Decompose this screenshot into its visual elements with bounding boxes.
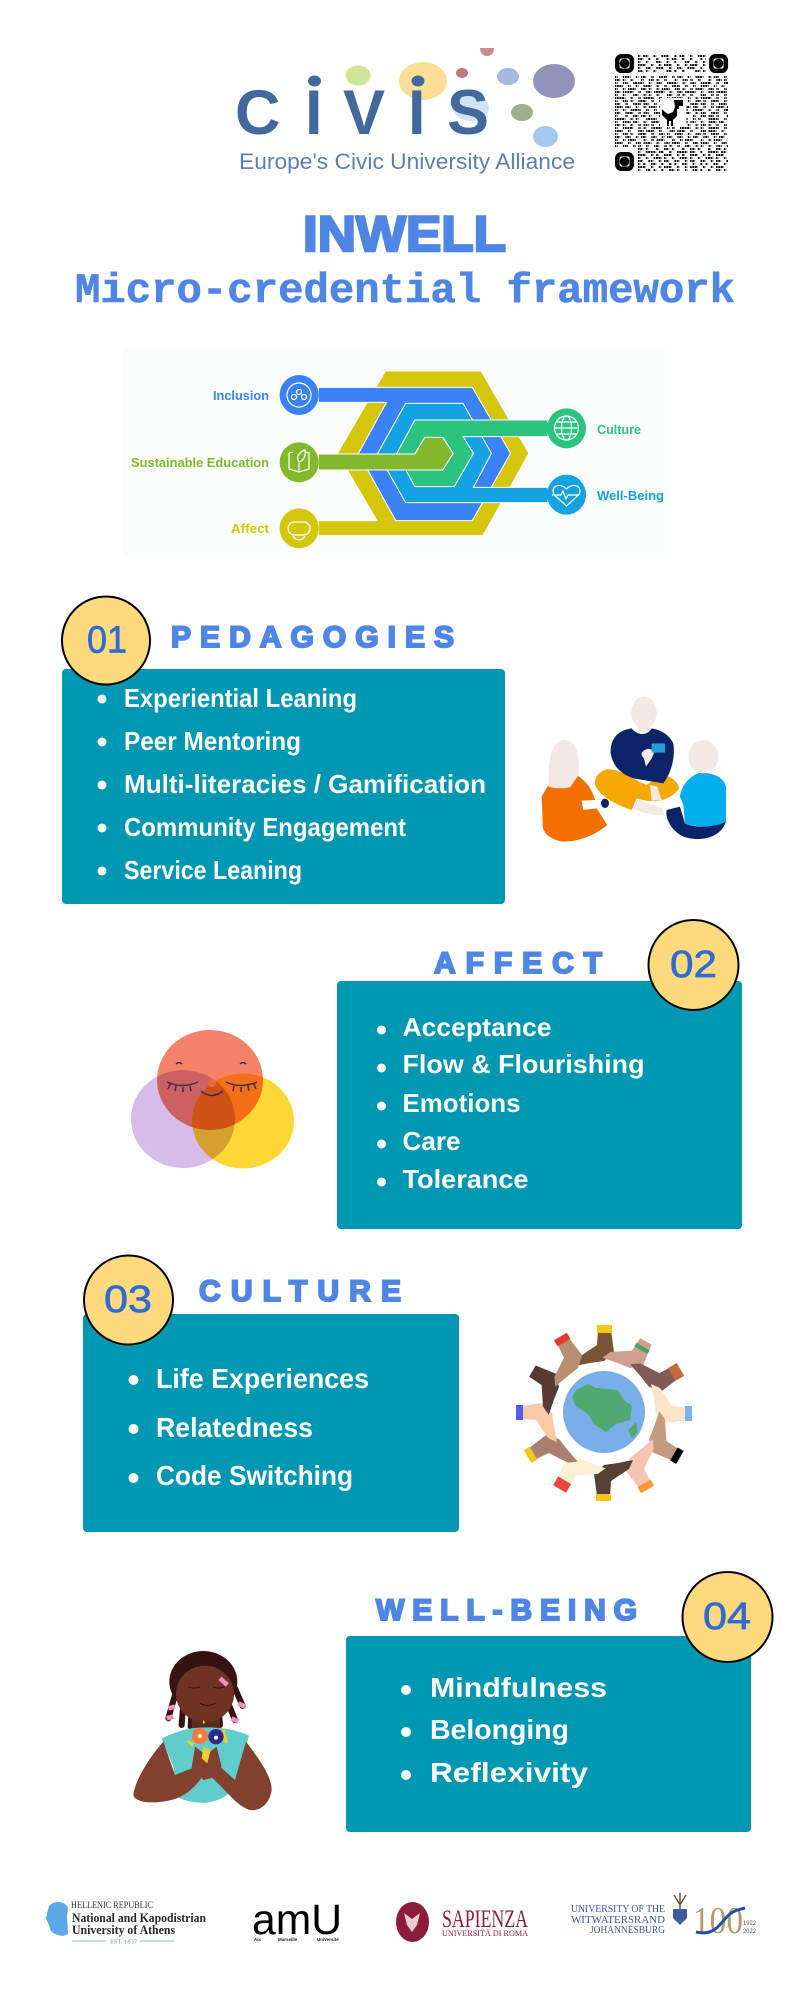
title: INWELL: INWELL	[303, 206, 506, 262]
section 01: Pedagogies	[62, 596, 726, 904]
logo: amU: amU	[252, 1896, 342, 1944]
logo: CIVIS	[235, 48, 575, 174]
logo: University of the Witwatersrand: 2022	[743, 1929, 757, 1935]
logo: University of Athens: National and Kapodistrian	[72, 1911, 206, 1925]
label: Affect: Affect	[231, 522, 270, 536]
badge 04: 04	[703, 1596, 751, 1638]
section 03: Culture	[83, 1256, 695, 1532]
panel: affect list: Acceptance	[402, 1012, 552, 1042]
hexagon framework diagram	[123, 348, 671, 555]
logo: University of Athens: EST. 1837	[110, 1938, 138, 1946]
logo: University of Athens: HELLENIC REPUBLIC	[71, 1900, 153, 1910]
heading: AFFECT: AFFECT	[434, 947, 602, 980]
panel: pedagogies list: Community Engagement	[124, 812, 406, 842]
panel: pedagogies list: Peer Mentoring	[124, 726, 301, 756]
badge 01	[62, 596, 150, 684]
logo: University of the Witwatersrand: UNIVERSITY OF THE	[571, 1904, 665, 1915]
panel: culture list	[83, 1314, 459, 1532]
heading: PEDAGOGIES: PEDAGOGIES	[171, 621, 454, 654]
icon: smiling face	[288, 522, 310, 540]
label: Sustainable Education: Sustainable Education	[131, 456, 269, 470]
panel: pedagogies list: Service Leaning	[124, 855, 302, 885]
logo: University of the Witwatersrand	[571, 1893, 757, 1942]
icon: globe	[554, 416, 578, 440]
panel: well-being list: Mindfulness	[430, 1672, 607, 1703]
badge 04	[682, 1572, 772, 1662]
icon: book and leaf	[289, 450, 309, 472]
logo: University of the Witwatersrand: WITWATERSRAND	[571, 1915, 665, 1926]
illustration: woman holding flowers	[133, 1651, 272, 1810]
logo: University of Athens	[46, 1900, 206, 1946]
panel: culture list: Relatedness	[156, 1412, 313, 1443]
label: Inclusion: Inclusion	[213, 389, 269, 403]
logo: University of the Witwatersrand: JOHANNESBURG	[590, 1925, 665, 1936]
panel: culture list: Code Switching	[156, 1460, 353, 1491]
subtitle: Micro-credential framework: Micro-credential framework	[75, 267, 735, 315]
logo: amU: Marseille	[278, 1937, 298, 1942]
badge 03	[84, 1256, 173, 1344]
logo: amU: Université	[317, 1937, 339, 1942]
heading: CULTURE: CULTURE	[199, 1275, 401, 1308]
panel: well-being list	[346, 1636, 751, 1832]
logo: University of the Witwatersrand: 100	[693, 1900, 743, 1942]
badge 02	[648, 920, 738, 1010]
logo: University of Athens: University of Athens	[72, 1923, 175, 1937]
section 04: Well-Being	[133, 1572, 772, 1832]
logo: Sapienza: SAPIENZA	[442, 1906, 528, 1933]
panel: pedagogies list	[62, 669, 505, 904]
panel: affect list: Flow & Flourishing	[402, 1049, 644, 1079]
logo: Sapienza	[396, 1902, 529, 1942]
QR code	[615, 54, 728, 171]
illustration: three people sitting	[542, 697, 726, 842]
illustration: overlapping smiling blobs	[131, 1030, 294, 1168]
panel: affect list: Tolerance	[402, 1164, 528, 1194]
section 02: Affect	[131, 920, 742, 1229]
icon: heart with pulse	[552, 485, 580, 506]
panel: well-being list: Belonging	[430, 1714, 569, 1745]
panel: culture list: Life Experiences	[156, 1363, 369, 1394]
badge 01: 01	[87, 620, 127, 662]
icon: people	[287, 383, 311, 407]
logo: CIVIS: CIVIS	[235, 78, 489, 148]
logo: Sapienza: UNIVERSITÀ DI ROMA	[442, 1928, 529, 1938]
logo: amU: Aix	[254, 1937, 262, 1942]
panel: affect list	[337, 981, 742, 1229]
logo: University of the Witwatersrand: 1922	[743, 1921, 757, 1927]
panel: pedagogies list: Multi-literacies / Gamification	[124, 769, 486, 799]
badge 02: 02	[670, 944, 717, 986]
badge 03: 03	[104, 1279, 152, 1321]
heading: WELL-BEING: WELL-BEING	[376, 1594, 637, 1627]
panel: pedagogies list: Experiential Leaning	[124, 683, 357, 713]
panel: well-being list: Reflexivity	[430, 1757, 588, 1788]
panel: affect list: Care	[402, 1126, 460, 1156]
illustration: hands around globe	[516, 1325, 695, 1504]
label: Culture: Culture	[597, 423, 641, 437]
logo: CIVIS: Europe's Civic University Alliance	[239, 149, 575, 174]
label: Well-Being: Well-Being	[597, 489, 664, 503]
panel: affect list: Emotions	[402, 1088, 520, 1118]
